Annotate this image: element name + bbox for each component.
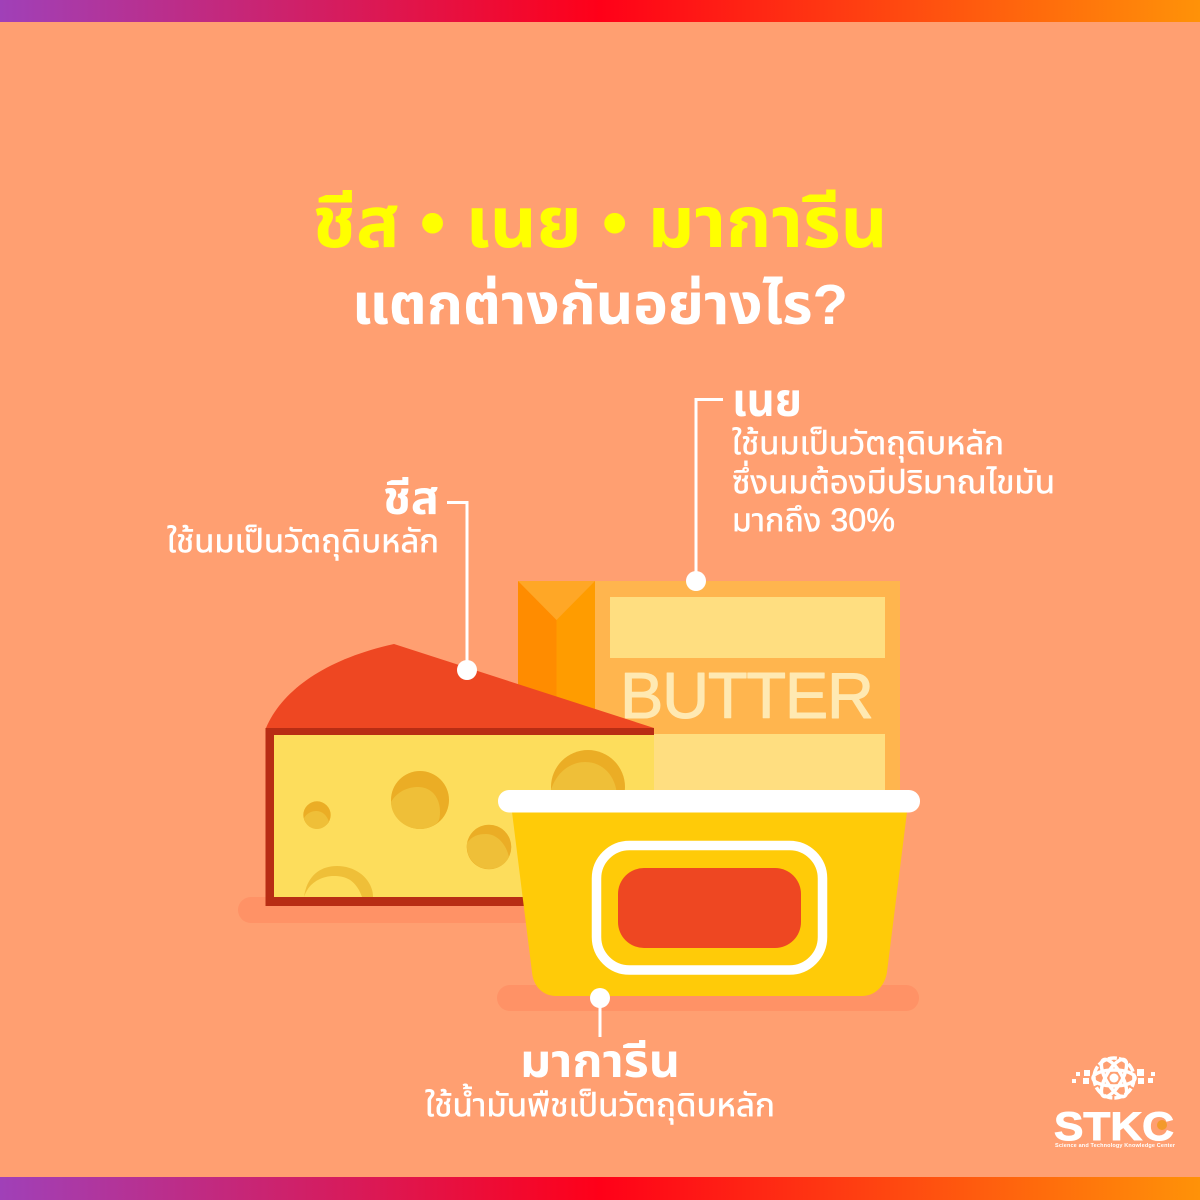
cheese description: ใช้นมเป็นวัตถุดิบหลัก xyxy=(167,523,439,560)
butter description: ซึ่งนมต้องมีปริมาณไขมัน xyxy=(732,460,1055,500)
cheese hole xyxy=(304,866,373,897)
logo atom icon xyxy=(1093,1056,1135,1100)
butter description xyxy=(732,425,1055,538)
title: ชีส • เนย • มาการีน xyxy=(312,184,888,263)
top gradient bar xyxy=(0,0,1200,22)
butter description: ใช้นมเป็นวัตถุดิบหลัก xyxy=(732,425,1004,462)
title: แตกต่างกันอย่างไร? xyxy=(352,273,848,337)
illustration: butter package xyxy=(518,581,900,796)
cheese heading: ชีส xyxy=(383,472,439,524)
margarine heading: มาการีน xyxy=(520,1035,680,1087)
shadow: margarine xyxy=(497,985,919,1011)
callout: margarine xyxy=(425,988,775,1124)
callout: cheese xyxy=(167,472,477,680)
butter heading: เนย xyxy=(732,374,802,426)
logo tagline: Science and Technology Knowledge Center xyxy=(1055,1143,1176,1149)
title xyxy=(312,184,888,337)
illustration: cheese wedge xyxy=(266,644,654,906)
margarine description: ใช้น้ำมันพืชเป็นวัตถุดิบหลัก xyxy=(425,1083,775,1124)
butter label: BUTTER xyxy=(620,659,874,732)
bottom gradient bar xyxy=(0,1177,1200,1200)
logo: STKC xyxy=(1054,1056,1176,1149)
shadow: cheese xyxy=(238,897,568,923)
cheese hole xyxy=(467,825,511,869)
cheese hole xyxy=(391,771,449,829)
callout: butter xyxy=(686,374,1055,591)
logo wordmark: STKC xyxy=(1054,1105,1174,1149)
butter description: มากถึง 30% xyxy=(732,502,895,538)
cheese hole xyxy=(551,750,625,790)
illustration: margarine tub xyxy=(498,790,920,996)
cheese hole xyxy=(303,801,331,829)
